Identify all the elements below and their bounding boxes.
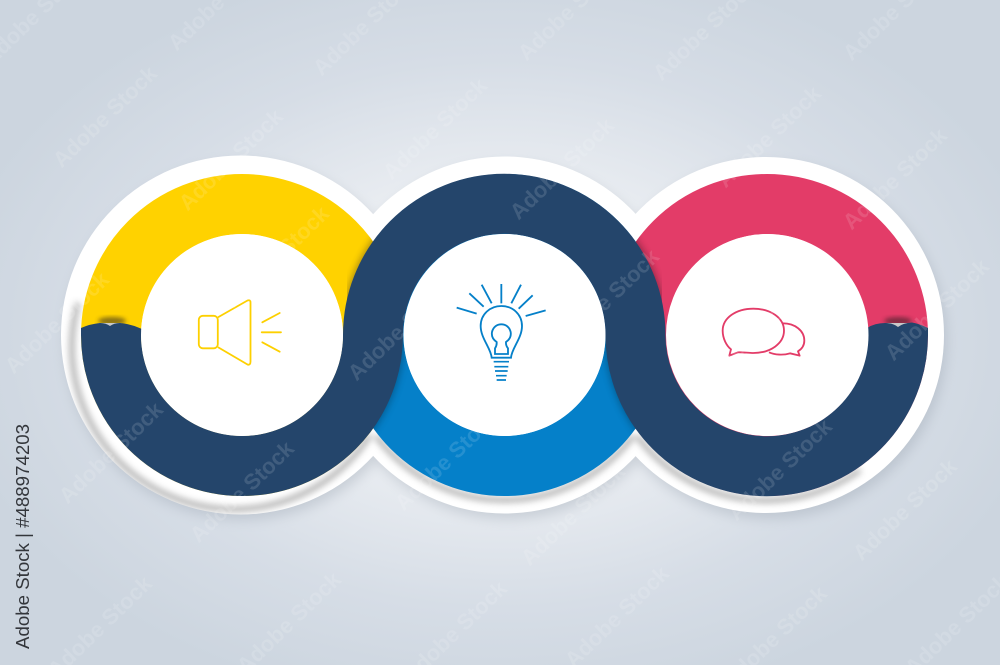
- icon: speaker: [199, 300, 281, 365]
- stock watermarks: Adobe Stock: [838, 122, 952, 234]
- stock watermarks: Adobe Stock: [378, 72, 492, 184]
- stock watermarks: Adobe Stock: [848, 453, 962, 565]
- silver fold at right tab: [886, 323, 911, 328]
- stock watermarks: Adobe Stock: [550, 243, 664, 355]
- stock watermarks: Adobe Stock: [343, 273, 457, 385]
- navy wave band: [81, 204, 928, 466]
- stock watermarks: Adobe Stock: [185, 435, 299, 547]
- stock watermarks: Adobe Stock: [54, 396, 168, 508]
- stock watermarks: Adobe Stock: [880, 253, 994, 365]
- white plate drop shadow: [64, 162, 947, 520]
- middle white inner circle: [404, 234, 606, 436]
- panel: blue ring segment: [374, 204, 636, 466]
- white connected plate: [61, 156, 944, 514]
- navy band shadow on yellow: [347, 237, 373, 299]
- left white inner circle: [141, 234, 343, 436]
- silver fold at left tab: [98, 323, 122, 328]
- navy band shadow on blue: [373, 334, 636, 432]
- icon: chat bubbles: [723, 309, 804, 356]
- panel: pink ring segment: [636, 204, 898, 466]
- panel: yellow ring segment: [111, 204, 373, 466]
- stock watermarks: Adobe Stock: [516, 458, 630, 570]
- fold shadow at right tab: [884, 317, 912, 325]
- stock watermarks: Adobe Stock: [0, 266, 114, 378]
- stock watermarks: Adobe Stock: [723, 413, 837, 525]
- fold shadow at left tab: [98, 317, 126, 325]
- stock watermarks: Adobe Stock: [220, 200, 334, 312]
- stock credit: Adobe Stock | #488974203: [13, 424, 33, 649]
- stock watermarks: Adobe Stock: [712, 80, 826, 192]
- stock watermarks: Adobe Stock: [390, 403, 504, 515]
- stock watermarks: Adobe Stock: [505, 112, 619, 224]
- right white inner circle: [666, 234, 868, 436]
- ring shadows on plate: [72, 303, 860, 509]
- navy band shadow on pink: [636, 237, 662, 302]
- stock watermarks: Adobe Stock: [683, 291, 797, 403]
- icon: light bulb: [457, 284, 546, 380]
- stock watermarks: Adobe Stock: [48, 60, 162, 172]
- stock watermarks: Adobe Stock: [174, 103, 288, 215]
